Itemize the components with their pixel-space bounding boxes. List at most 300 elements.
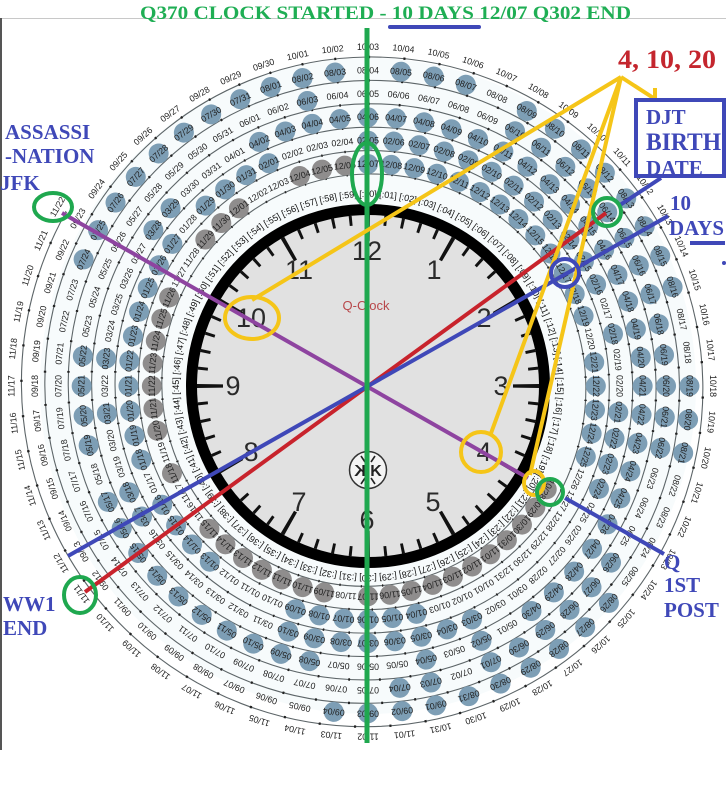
spiral of dates: 02/01 [257,154,281,172]
title underline [390,25,479,29]
spiral of dates: 03/31 [200,160,223,181]
spiral of dates: 09/09 [162,642,186,663]
minute labels ring: [:12] [543,317,558,337]
spiral of dates: 07/24 [75,247,93,271]
spiral of dates: 02/04 [331,136,354,148]
minute labels ring: [:52] [216,248,235,267]
spiral of dates: 01/06 [357,615,379,625]
clock hour numerals: 1 [426,255,442,285]
spiral of dates: 08/13 [616,187,637,210]
minute labels ring: [:41] [184,454,201,474]
spiral of dates: 10/15 [687,268,703,292]
spiral of dates: 10/02 [321,43,344,55]
clock face [192,210,544,562]
minute labels ring: [:17] [549,416,563,436]
spiral of dates: 05/24 [86,285,103,309]
spiral of dates: 05/05 [386,658,409,671]
spiral of dates: 04/07 [385,112,408,124]
clock hour numerals: 4 [476,437,492,467]
clock hour numerals: 10 [236,303,266,333]
spiral of dates: 07/02 [449,666,474,682]
spiral of dates: 07/10 [203,641,227,661]
10 days label: 10 [670,191,691,215]
spiral of dates: 11/05 [400,584,423,598]
clock hour numerals: 2 [476,303,492,333]
spiral of dates: 11/26 [160,286,178,309]
title: Q370 CLOCK STARTED - 10 DAYS 12/07 Q302 END [140,3,631,24]
spiral of dates: 09/25 [107,150,130,173]
WW1 end label: WW1 [3,592,56,616]
spiral of dates: 12/01 [227,198,251,219]
spiral of dates: 03/27 [129,241,148,266]
spiral of dates: 05/01 [495,617,519,637]
spiral of dates: 05/14 [146,564,168,587]
spiral of dates: 04/04 [300,117,324,131]
spiral of dates: 10/30 [511,513,533,536]
spiral of dates: 02/28 [527,564,550,586]
spiral of dates: 12/11 [447,173,471,191]
spiral of dates: 12/24 [584,422,599,445]
spiral of dates: 11/16 [8,412,20,434]
spiral of dates: 05/09 [269,646,293,662]
minute labels ring: [:05] [454,211,474,228]
green circles on key dates [34,143,621,613]
spiral of dates: 09/05 [288,700,312,714]
spiral of dates: 02/20 [614,375,624,397]
spiral of dates: 11/17 [173,481,192,505]
minute labels ring: [:21] [514,489,533,509]
spiral of dates: 02/11 [502,175,525,196]
spiral of dates: 05/17 [99,490,117,514]
spiral of dates: 02/21 [612,401,624,424]
spiral of dates: 03/03 [460,610,484,629]
spiral of dates: 07/23 [64,278,80,302]
spiral of dates: 06/12 [554,156,577,178]
spiral of dates: 04/21 [638,375,648,397]
spiral of dates: 01/11 [238,580,262,600]
minute labels ring: [:24] [471,532,491,551]
spiral of dates: 03/06 [383,635,406,647]
minute labels ring: [:18] [543,435,558,455]
spiral of dates: 11/14 [214,533,237,555]
spiral of dates: 03/11 [251,613,275,631]
date spiral lines [21,57,703,727]
spiral of dates: 10/14 [673,234,691,259]
spiral of dates: 03/18 [120,480,138,504]
spiral of dates: 11/03 [320,729,342,741]
spiral of dates: 03/09 [302,631,326,645]
spiral of dates: 08/02 [291,71,314,85]
spiral of dates: 04/06 [357,112,379,122]
spiral of dates: 10/09 [557,99,581,120]
spiral of dates: 11/02 [357,732,379,742]
spiral of dates: 12/28 [544,509,565,533]
spiral of dates: 01/10 [260,592,284,610]
spiral of dates: 11/10 [291,579,314,595]
spiral of dates: 05/28 [142,181,164,204]
spiral of dates: 03/28 [143,218,164,242]
spiral of dates: 01/20 [124,399,136,422]
spiral of dates: 02/02 [281,146,305,162]
spiral of dates: 10/17 [704,339,717,362]
minute labels ring: [:57] [299,196,319,211]
spiral of dates: 10/04 [392,42,415,55]
minute labels ring: [:42] [178,435,193,455]
spiral of dates: 01/24 [131,299,147,324]
spiral of dates: 01/18 [133,448,149,472]
blue circle on 12/17 [551,259,579,287]
spiral of dates: 01/26 [149,253,169,277]
spiral of dates: 08/05 [390,66,413,78]
minute labels ring: [:51] [203,263,222,283]
spiral of dates: 03/17 [132,504,152,529]
4, 10, 20 callout: 4, 10, 20 [618,45,716,74]
spiral of dates: 07/19 [54,407,66,430]
spiral of dates: 05/20 [77,404,90,427]
clock hour numerals: 11 [285,255,313,285]
spiral of dates: 01/19 [127,424,142,447]
spiral of dates: 04/23 [630,431,645,455]
spiral of dates: 06/07 [417,92,441,107]
minute labels ring: [:08] [501,248,520,267]
spiral of dates: 01/13 [198,551,221,573]
spiral of dates: 04/17 [608,263,627,287]
spiral of dates: 04/03 [273,123,297,140]
spiral of dates: 01/08 [307,608,331,623]
minute labels ring: [:39] [203,489,222,509]
spiral of dates: 11/21 [32,228,50,252]
minute labels ring: [:44] [171,397,183,415]
spiral of dates: 10/06 [461,54,485,71]
spiral of dates: 09/13 [71,539,91,564]
spiral of dates: 09/08 [191,661,215,681]
spiral of dates: 11/12 [51,551,71,575]
spiral of dates: 02/15 [574,249,594,273]
clock hour numerals: 8 [243,437,259,467]
spiral of dates: 03/19 [111,455,127,479]
spiral of dates: 12/03 [266,176,291,194]
spiral of dates: 09/07 [222,677,246,695]
spiral of dates: 01/07 [332,613,355,625]
clock hour numerals: 6 [359,505,375,535]
minute labels ring: [:56] [280,202,300,219]
spiral of dates: 08/28 [547,638,571,659]
spiral of dates: 08/29 [519,658,543,678]
spiral of dates: 09/28 [187,84,212,104]
spiral of dates: 10/31 [429,721,453,735]
spiral of dates: 03/12 [226,600,251,620]
minute labels ring: [:32] [318,567,338,581]
spiral of dates: 07/18 [59,438,73,462]
spiral of dates: 07/30 [199,104,223,124]
spiral of dates: 12/10 [425,166,449,182]
minute labels ring: [:36] [245,532,265,551]
spiral of dates: 12/14 [507,208,530,230]
icon: centre logo: K [370,463,382,480]
spiral of dates: 05/23 [80,314,94,338]
spiral of dates: 03/16 [147,527,168,551]
spiral of dates: 05/26 [108,230,128,254]
spiral of dates: 06/22 [653,436,667,460]
spiral of dates: 01/09 [283,601,307,618]
minute labels ring: [:48] [178,317,193,337]
minute labels ring: [:00] [359,189,377,199]
spiral of dates: 11/08 [149,661,172,682]
spiral of dates: 05/19 [81,433,96,457]
spiral of dates: 10/31 [495,529,518,551]
spiral of dates: 07/03 [419,675,443,690]
spiral of dates: 12/31 [492,563,516,584]
WW1 end label: END [3,616,47,640]
spiral of dates: 08/12 [594,161,616,184]
spiral of dates: 05/12 [190,604,214,625]
spiral of dates: 11/06 [379,589,401,601]
spiral of dates: 11/22 [48,195,67,219]
green vertical line at 12-6 [364,28,370,743]
minute labels ring: [:16] [553,397,565,415]
minute labels ring: [:40] [193,472,210,492]
DJT birth date box: DJT [646,105,686,129]
spiral of dates: 04/10 [466,130,490,148]
spiral of dates: 03/02 [483,597,508,617]
spiral of dates: 10/18 [708,375,718,397]
spiral of dates: 01/28 [177,212,199,235]
spiral of dates: 05/27 [124,204,145,228]
spiral of dates: 07/28 [147,142,170,165]
spiral of dates: 08/10 [543,118,567,139]
minute labels ring: [:54] [245,221,265,240]
blue line: 10 days [68,216,668,556]
spiral of dates: 10/23 [658,547,678,572]
spiral of dates: 06/09 [475,109,500,127]
spiral of dates: 10/28 [530,678,554,698]
purple line: JFK [62,213,528,478]
spiral of dates: 12/27 [557,489,577,513]
spiral of dates: 02/03 [305,140,329,154]
spiral of dates: 01/27 [162,232,183,256]
spiral of dates: 06/03 [296,94,319,108]
yellow circles on 10, 4 and 10/28 [225,297,544,495]
spiral of dates: 06/10 [503,121,527,141]
minute labels ring: [:49] [184,298,201,318]
clock hour numerals: 9 [225,371,241,401]
spiral of dates: 01/17 [141,471,160,495]
minute labels ring: [:50] [193,280,210,300]
spiral of dates: 08/11 [570,139,592,160]
Assassination JFK label [0,120,94,195]
spiral of dates: 11/30 [210,212,233,234]
blue line: DJT box connector [620,178,661,205]
spiral of dates: 11/28 [181,246,202,269]
spiral of dates: 10/30 [464,710,488,727]
spiral of dates: 07/16 [77,499,95,523]
spiral of dates: 01/01 [472,577,496,597]
spiral of dates: 11/13 [231,548,255,568]
spiral of dates: 06/23 [644,466,661,491]
spiral of dates: 02/12 [523,191,546,213]
minute labels ring: [:55] [262,211,282,228]
spiral of dates: 12/06 [333,159,356,172]
spiral of dates: 05/11 [215,621,239,640]
icon: centre logo: K [354,463,366,480]
spiral of dates: 11/19 [155,441,172,464]
Q 1st post label: 1ST [664,573,700,597]
spiral of dates: 08/15 [651,244,669,268]
spiral of dates: 05/06 [357,662,379,672]
spiral of dates: 10/26 [589,634,612,656]
spiral of dates: 11/18 [7,337,19,360]
spiral of dates: 04/28 [563,560,585,583]
spiral of dates: 06/16 [630,253,648,278]
spiral of dates: 04/14 [559,193,581,216]
spiral of dates: 12/22 [591,375,601,397]
spiral of dates: 10/29 [525,496,546,519]
spiral of dates: 11/04 [283,723,306,737]
spiral of dates: 10/20 [699,446,713,470]
minute labels ring: [:10] [526,280,543,300]
minute labels ring: [:30] [359,573,377,583]
spiral of dates: 08/18 [681,341,693,364]
spiral of dates: 11/17 [6,375,16,397]
spiral of dates: 12/19 [575,304,592,328]
spiral of dates: 09/03 [357,708,379,718]
spiral of dates: 07/22 [57,310,71,333]
spiral of dates: 08/03 [324,66,347,79]
spiral of dates: 07/31 [228,90,252,108]
spiral of dates: 09/22 [53,238,71,262]
spiral of dates: 09/04 [322,706,345,718]
spiral of dates: 09/21 [42,271,58,295]
spiral of dates: 08/04 [357,65,379,75]
minute labels ring: [:25] [454,544,474,561]
spiral of dates: 07/15 [92,528,111,552]
spiral of dates: 07/07 [293,677,316,691]
spiral of dates: 10/21 [689,481,705,505]
spiral of dates: 02/09 [456,151,481,169]
spiral of dates: 02/16 [587,272,605,297]
spiral of dates: 04/26 [598,512,617,536]
spiral of dates: 08/06 [422,69,446,84]
spiral of dates: 08/09 [515,101,539,121]
spiral of dates: 11/22 [147,375,157,397]
spiral of dates: 02/14 [559,228,580,252]
spiral of dates: 01/22 [123,349,136,372]
spiral of dates: 09/23 [68,206,88,230]
spiral of dates: 08/24 [638,536,658,560]
spiral of dates: 05/25 [96,257,114,281]
spiral of dates: 03/07 [357,638,379,648]
spiral of dates: 09/17 [31,409,43,432]
spiral of dates: 06/19 [658,343,670,366]
spiral of dates: 04/25 [611,486,629,511]
spiral of dates: 04/30 [520,601,543,622]
spiral of dates: 09/18 [30,375,40,397]
Q 1st post label [664,550,719,622]
spiral of dates: 05/02 [469,632,494,650]
spiral of dates: 03/13 [204,585,227,606]
spiral of dates: 10/07 [494,66,519,84]
spiral of dates: 11/21 [147,397,160,420]
spiral of dates: 03/23 [100,347,112,370]
spiral of dates: 10/29 [498,696,522,714]
spiral of dates: 11/05 [247,713,271,729]
spiral of dates: 08/14 [635,214,655,238]
minute labels ring: [:22] [501,505,520,524]
spiral of dates: 06/17 [642,282,659,306]
spiral of dates: 12/02 [246,186,270,205]
spiral of dates: 09/27 [158,103,182,124]
DJT birth date box: DATE [646,156,703,180]
yellow lines from 4, 10, 20 [252,77,655,475]
spiral of dates: 07/04 [388,682,411,694]
spiral of dates: 07/05 [357,685,379,695]
spiral of dates: 08/21 [676,441,690,465]
minute labels ring: [:01] [379,189,397,201]
spiral of dates: 07/08 [262,668,286,684]
Q 1st post label: Q [664,550,680,574]
Q 1st post label: POST [664,598,719,622]
spiral of dates: 10/28 [537,477,557,501]
spiral of dates: 06/20 [661,375,671,397]
spiral of dates: 07/27 [125,165,147,188]
spiral of dates: 11/03 [441,568,465,586]
spiral of dates: 03/04 [435,621,459,638]
spiral of dates: 12/29 [528,529,550,552]
spiral of dates: 10/05 [427,46,451,61]
minute labels ring: [:46] [171,357,183,375]
Assassination JFK label: ASSASSI [5,120,90,144]
spiral of dates: 12/05 [310,162,334,177]
spiral of dates: 03/20 [104,429,119,452]
DJT birth date box: BIRTH [646,129,722,156]
spiral of dates: 08/17 [674,308,689,331]
minute labels ring: [:26] [436,553,456,570]
spiral of dates: 03/24 [103,319,117,343]
spiral of dates: 06/14 [597,200,618,224]
Assassination JFK label: -NATION [5,144,94,168]
minute labels ring: [:13] [549,336,563,356]
icon: centre logo [350,452,386,488]
spiral of dates: 12/07 [357,159,379,169]
spiral of dates: 02/26 [563,523,584,547]
spiral of dates: 07/14 [109,555,130,579]
clock hour numerals [225,236,509,535]
spiral of dates: 02/10 [480,162,504,182]
10 days label: DAYS [669,216,724,240]
spiral of dates: 04/09 [439,121,464,137]
minute labels ring: [:20] [526,472,543,492]
minute labels ring: [:11] [535,298,551,318]
spiral of dates: 02/27 [546,544,568,568]
spiral of dates: 11/09 [120,638,143,660]
minute labels ring: [:29] [379,571,397,583]
spiral of dates: 06/01 [238,111,262,130]
spiral of dates: 01/31 [234,165,258,185]
spiral of dates: 09/30 [252,57,276,73]
spiral of dates: 10/01 [286,48,310,62]
minute labels ring: [:04] [436,202,456,219]
spiral of dates: 01/15 [166,513,187,537]
spiral of dates: 02/07 [407,138,431,152]
spiral of dates: 07/25 [88,218,108,242]
spiral of dates: 06/28 [558,599,581,621]
spiral of dates: 02/24 [590,477,608,501]
minute labels ring: [:43] [173,416,187,436]
spiral of dates: 11/06 [213,699,237,717]
minute labels ring: [:28] [398,567,418,581]
spiral of dates: 05/21 [77,375,87,397]
spiral of dates: 07/11 [176,623,200,644]
